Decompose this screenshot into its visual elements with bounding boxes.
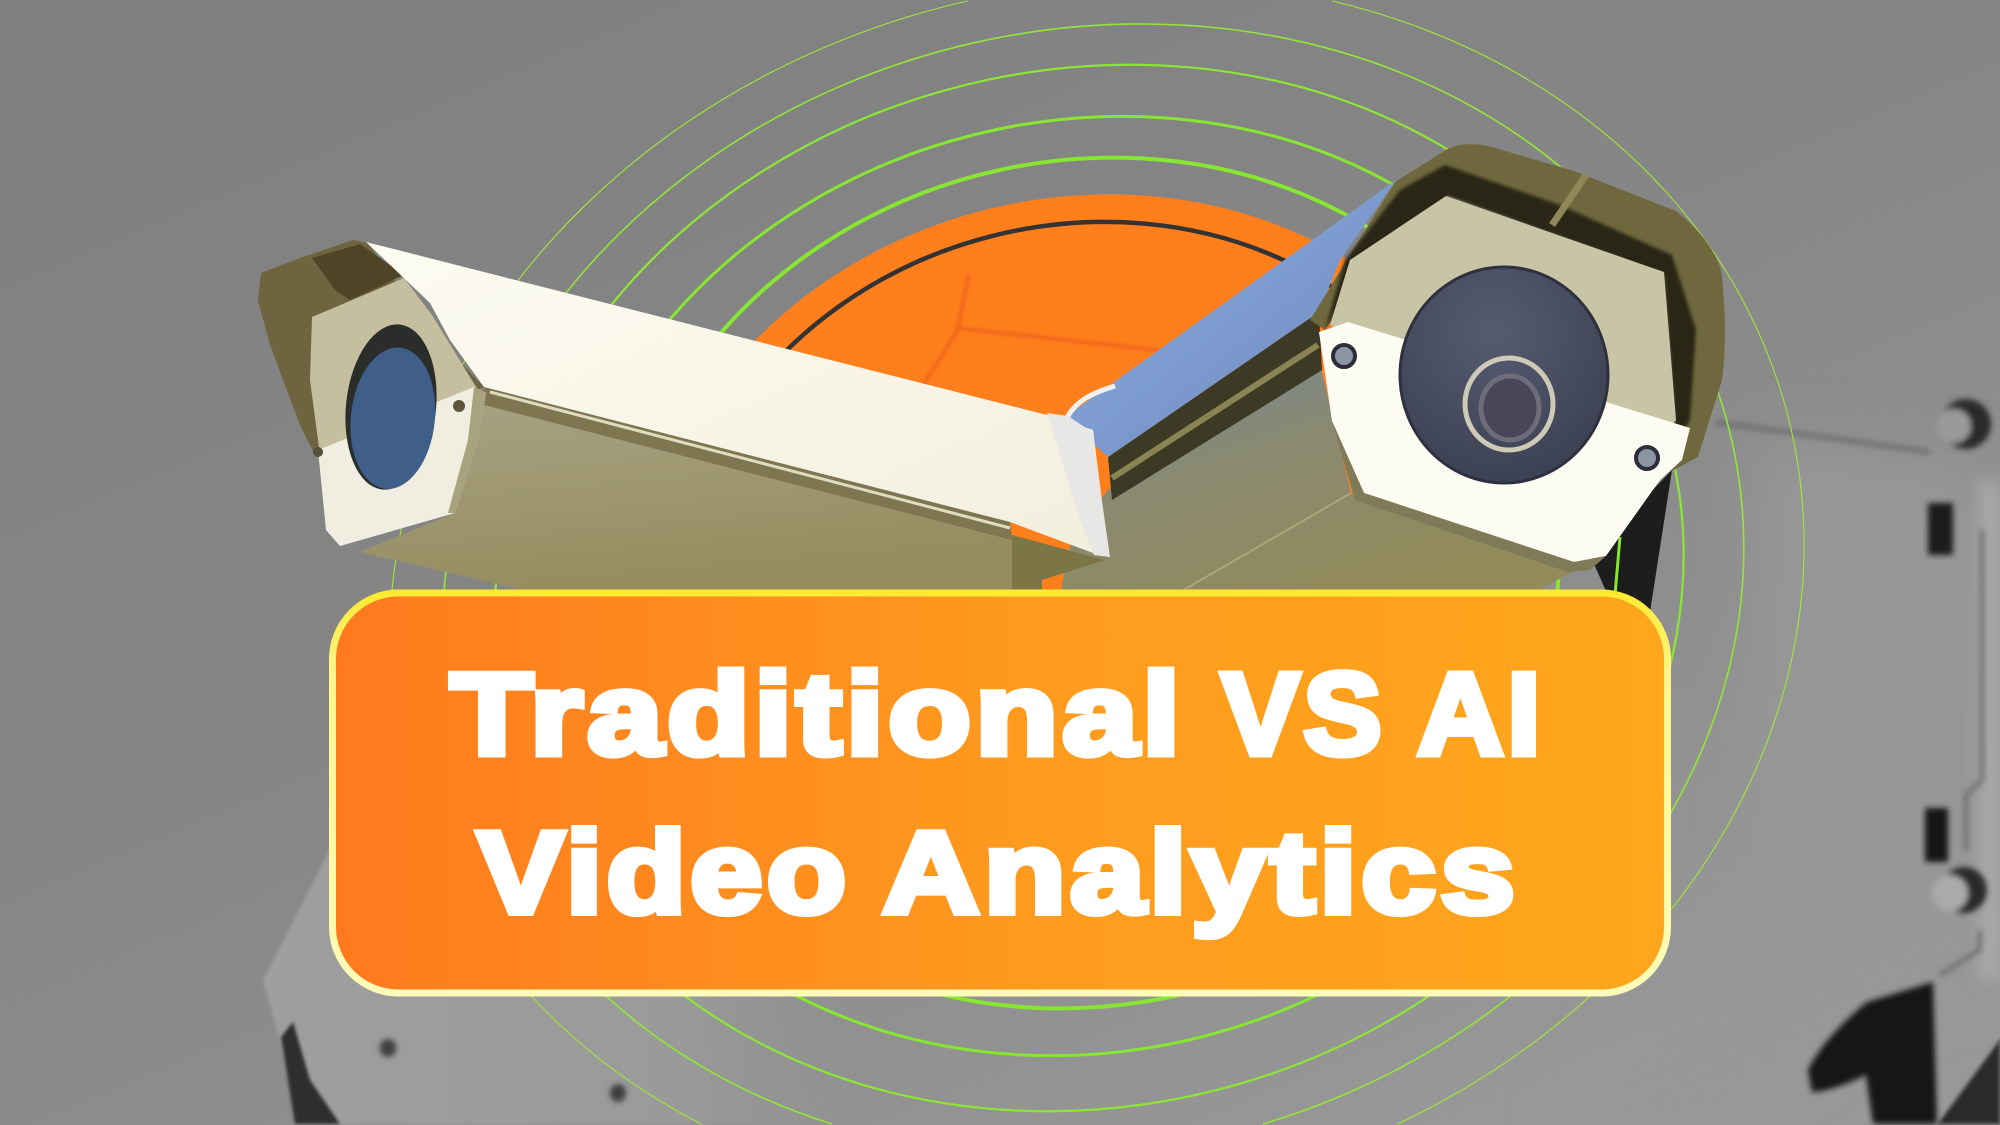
rear cable xyxy=(1590,470,1672,612)
inner lens xyxy=(1465,358,1553,450)
side ribs xyxy=(1108,312,1322,500)
dark inner ring xyxy=(598,137,1562,1029)
face screw xyxy=(453,400,465,412)
right camera xyxy=(1060,144,1725,612)
camera screw xyxy=(610,1084,626,1102)
front collar xyxy=(310,278,478,455)
lens xyxy=(1400,267,1608,483)
title heading: Analytics xyxy=(882,808,1520,938)
corrugated hose xyxy=(1938,1040,2000,1124)
hood inner shadow xyxy=(312,244,404,300)
ring crossing cable xyxy=(1615,537,1620,595)
hood dark inner xyxy=(1325,165,1696,445)
bright wall edge xyxy=(1980,480,2000,980)
lower bracket slot xyxy=(1925,808,1948,862)
hood underside xyxy=(258,240,484,455)
title heading xyxy=(450,649,1544,938)
upper bracket slot xyxy=(1928,503,1953,555)
front face xyxy=(318,387,486,546)
left camera xyxy=(258,240,1110,592)
title heading: AI xyxy=(1418,649,1544,779)
mount strap xyxy=(1808,982,1937,1124)
lens glass xyxy=(344,343,442,493)
radar rings xyxy=(390,1,1804,1124)
title heading: Traditional xyxy=(450,649,1184,779)
top cover xyxy=(366,242,1109,557)
reflected building lines xyxy=(908,274,1175,408)
body end xyxy=(1012,535,1105,592)
bracket edge xyxy=(1940,530,1982,975)
title panel xyxy=(332,593,1668,993)
hood xyxy=(1310,144,1725,472)
panel box xyxy=(332,593,1668,993)
lower hinge xyxy=(1932,867,1987,913)
bracket shadow line xyxy=(1715,422,1930,452)
camera body xyxy=(360,400,1012,592)
face rim xyxy=(1332,421,1606,572)
second camera silhouette xyxy=(263,830,860,1124)
top rail xyxy=(484,385,1012,540)
hood ridge xyxy=(1552,175,1586,225)
left screw xyxy=(1333,345,1355,367)
orange disc xyxy=(557,102,1603,1064)
camera strap xyxy=(281,1022,340,1124)
body seam xyxy=(1175,493,1351,595)
wall panel on right xyxy=(1560,440,1985,1120)
top blue cover xyxy=(1064,180,1396,457)
lens xyxy=(338,320,444,494)
camera body xyxy=(1060,360,1574,595)
face upper xyxy=(1330,196,1676,440)
title heading: VS xyxy=(1222,649,1386,779)
face side edge xyxy=(448,387,486,513)
rib highlight xyxy=(1112,345,1318,478)
mounting ring xyxy=(1067,386,1115,418)
right screw xyxy=(1636,447,1658,469)
end cap xyxy=(1047,413,1110,557)
upper hinge xyxy=(1937,399,1991,449)
rail highlight xyxy=(490,392,1010,528)
face lower xyxy=(1319,322,1690,562)
camera screw xyxy=(380,1039,396,1057)
side screw xyxy=(313,447,323,457)
title heading: Video xyxy=(478,808,850,938)
